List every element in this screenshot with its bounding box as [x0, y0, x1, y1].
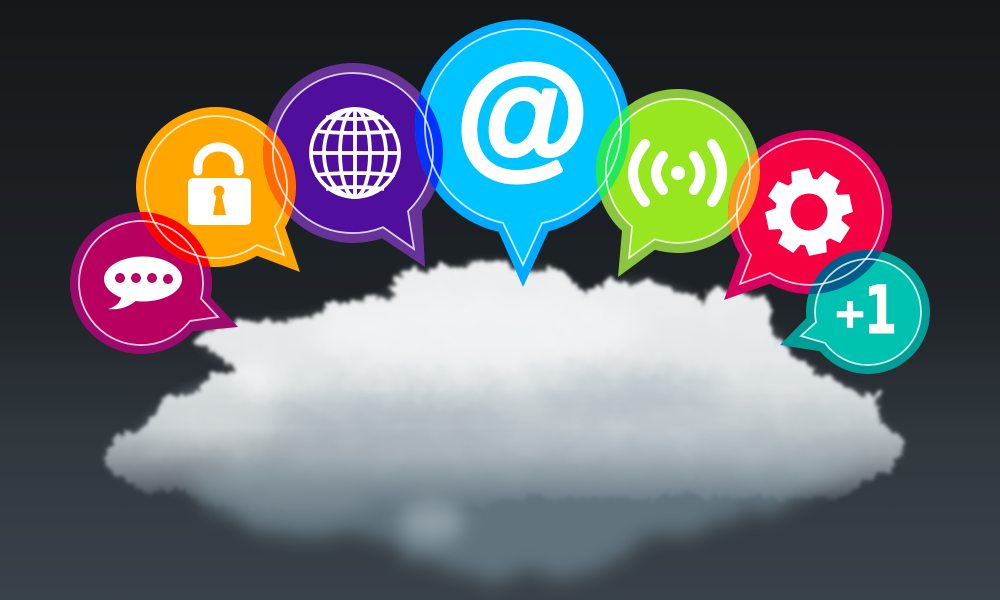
- icon: globe: [311, 109, 399, 197]
- icon: plus one: +: [833, 291, 867, 337]
- icon: chat bubble: [104, 256, 182, 309]
- speech bubble: blue at sign: [415, 20, 630, 287]
- speech bubble: magenta chat: [70, 212, 238, 354]
- icon: plus one: 1: [864, 272, 897, 349]
- icon: wireless signal: [633, 144, 722, 202]
- speech bubble: green signal: [596, 89, 760, 277]
- icon: gear: [765, 168, 853, 256]
- speech bubble: red gear: [724, 130, 892, 300]
- cloud: [90, 250, 910, 583]
- speech bubble: orange lock: [136, 107, 300, 272]
- speech bubble: teal plus one: [780, 250, 930, 374]
- icon: at sign: @: [456, 38, 589, 190]
- overlapping bubble tints: [70, 63, 930, 374]
- speech bubble: purple globe: [263, 63, 443, 267]
- cloud: bright upper lobe: [90, 250, 910, 520]
- icon: padlock: [188, 147, 251, 225]
- icon: plus one: [833, 272, 897, 349]
- white inner outlines: [79, 29, 921, 365]
- cloud: dark lower lobe: [170, 426, 860, 583]
